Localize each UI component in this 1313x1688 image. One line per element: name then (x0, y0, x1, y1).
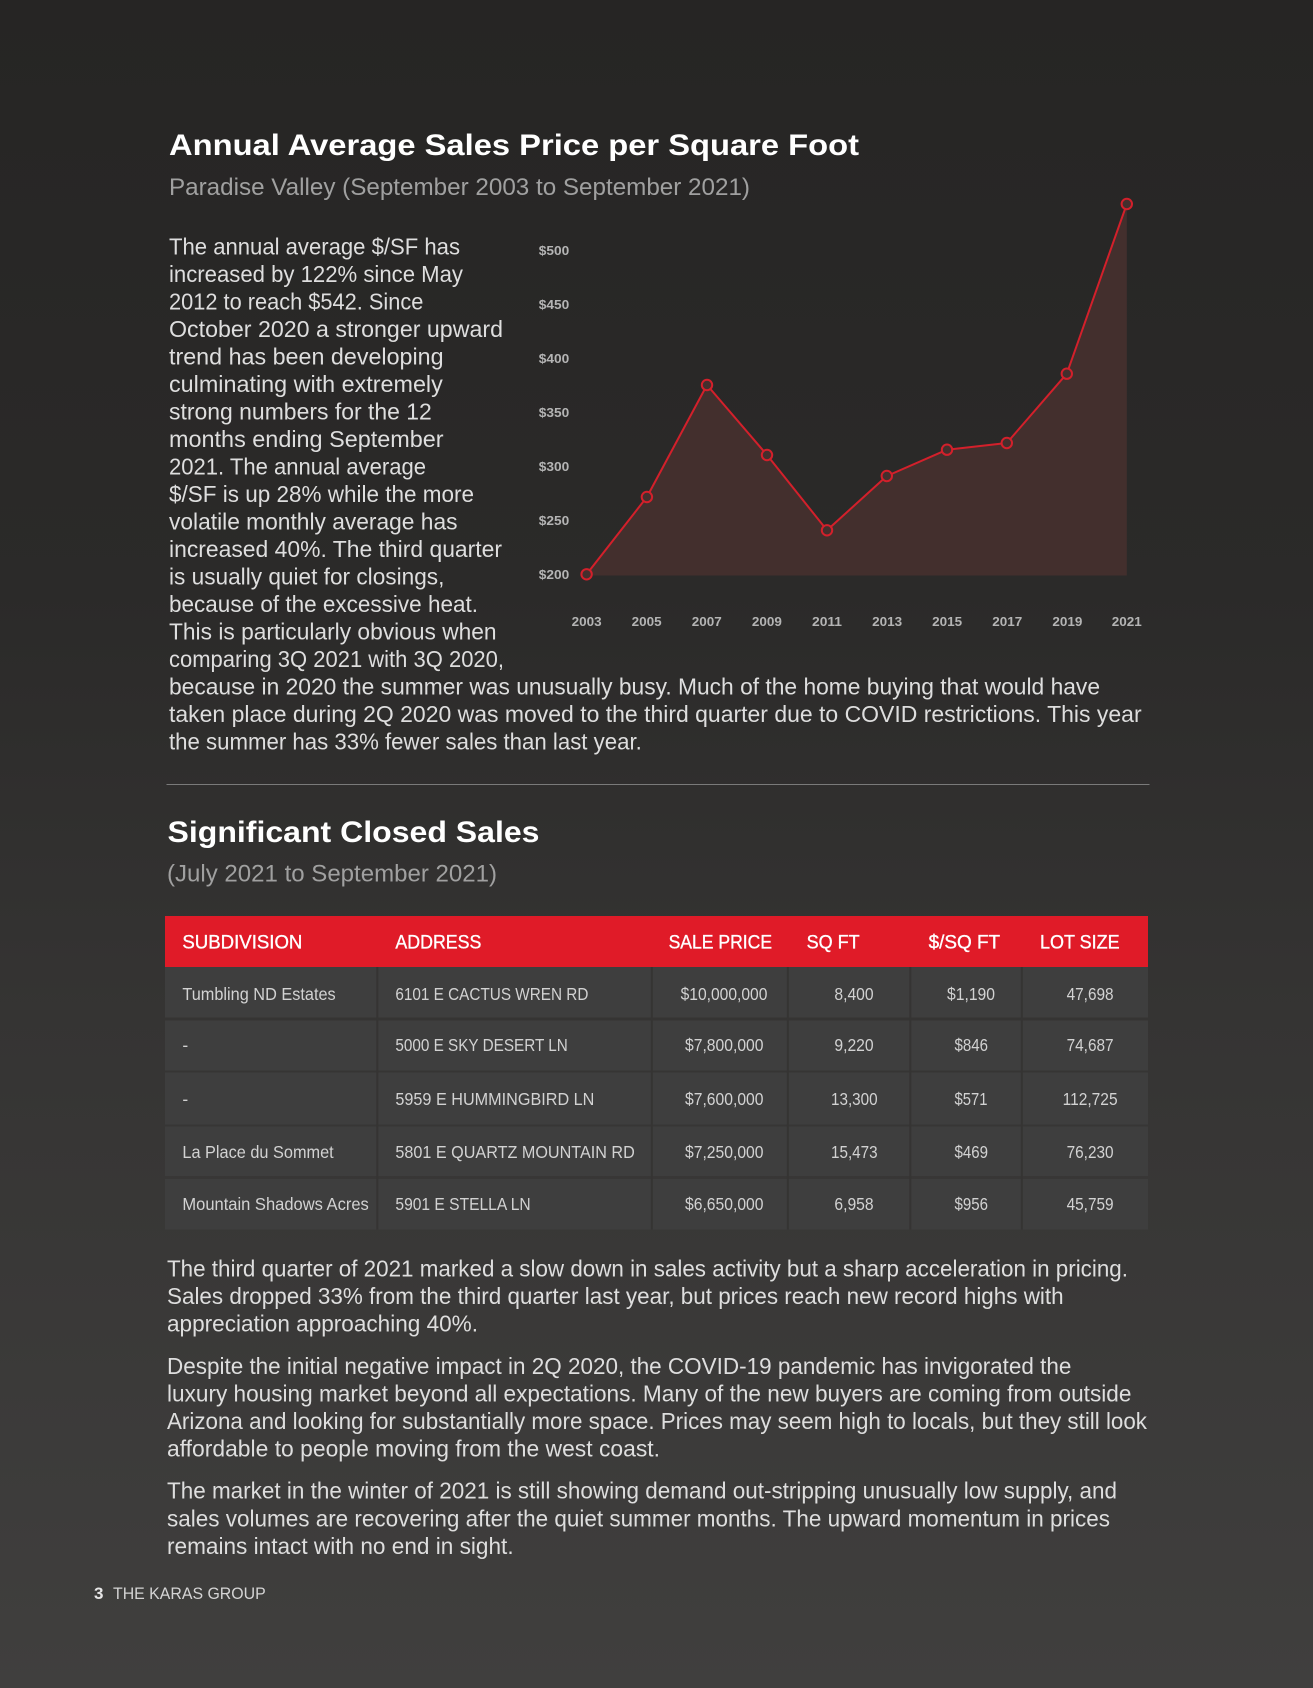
text block: annual average commentary: 2021. The annual average (169, 453, 426, 479)
row 2: 9,220 (834, 1035, 874, 1055)
row 2: $846 (954, 1035, 988, 1055)
text block: annual average commentary: October 2020 a stronger upward (169, 316, 503, 342)
row 1: 6101 E CACTUS WREN RD (395, 984, 588, 1004)
paragraph 3: sales volumes are recovering after the quiet summer months. The upward momentum in prices (167, 1505, 1110, 1531)
paragraph 3 (167, 1478, 1117, 1559)
x axis labels: 2015 (932, 615, 962, 629)
text block: annual average commentary: months ending September (169, 426, 444, 452)
paragraph 2: affordable to people moving from the west coast. (167, 1436, 660, 1462)
x axis labels: 2005 (632, 615, 662, 629)
paragraph 1: The third quarter of 2021 marked a slow down in sales activity but a sharp acceleration in pricing. (167, 1256, 1128, 1282)
price line (587, 204, 1127, 574)
row 4: $7,250,000 (685, 1142, 764, 1162)
y axis labels: $500 (539, 244, 569, 258)
row 5: Mountain Shadows Acres (182, 1194, 369, 1214)
row 3: 5959 E HUMMINGBIRD LN (395, 1089, 594, 1109)
row 4: 76,230 (1067, 1142, 1114, 1162)
table header row: SUBDIVISION (182, 932, 302, 954)
row 5: 45,759 (1067, 1194, 1114, 1214)
text block: annual average commentary: the summer has 33% fewer sales than last year. (169, 728, 642, 754)
text block: annual average commentary: comparing 3Q 2021 with 3Q 2020, (169, 646, 504, 672)
footer: page number and company: 3 (94, 1584, 103, 1603)
heading: significant closed sales: Significant Closed Sales (168, 816, 540, 849)
y axis labels: $400 (539, 352, 569, 366)
text block: annual average commentary: taken place during 2Q 2020 was moved to the third quarter due to COVID restrictions. This year (169, 701, 1142, 727)
row 2 (165, 1020, 1148, 1070)
text block: annual average commentary: culminating with extremely (169, 371, 443, 397)
paragraph 1: appreciation approaching 40%. (167, 1311, 478, 1337)
data point markers (581, 199, 1132, 580)
paragraph 3: The market in the winter of 2021 is still showing demand out-stripping unusually low supply, and (167, 1478, 1117, 1504)
table header row (165, 916, 1148, 967)
row 1: 8,400 (834, 984, 874, 1004)
row 1 (165, 967, 1148, 1018)
x axis labels: 2019 (1052, 615, 1082, 629)
x axis labels: 2017 (992, 615, 1022, 629)
text block: annual average commentary: This is particularly obvious when (169, 618, 497, 644)
y axis labels: $450 (539, 298, 569, 312)
text block: annual average commentary (169, 233, 1142, 754)
row 3: $571 (954, 1089, 988, 1109)
text block: annual average commentary: trend has been developing (169, 343, 444, 369)
text block: annual average commentary: because in 2020 the summer was unusually busy. Much of the home buying that would have (169, 673, 1100, 699)
row 3: $7,600,000 (685, 1089, 764, 1109)
row 4: 15,473 (831, 1142, 878, 1162)
row 5: 5901 E STELLA LN (395, 1194, 531, 1214)
paragraph 2: Despite the initial negative impact in 2Q 2020, the COVID-19 pandemic has invigorated the (167, 1353, 1071, 1379)
row 5: 6,958 (834, 1194, 874, 1214)
table header row: SALE PRICE (669, 932, 772, 954)
x axis labels: 2013 (872, 615, 902, 629)
area fill under line (587, 204, 1127, 576)
y axis labels: $350 (539, 406, 569, 420)
paragraph 2 (167, 1353, 1147, 1462)
x axis labels (572, 615, 1142, 629)
row 5 (165, 1179, 1148, 1230)
x axis labels: 2021 (1112, 615, 1142, 629)
subheading: date range: (July 2021 to September 2021) (167, 860, 497, 888)
text block: annual average commentary: 2012 to reach $542. Since (169, 288, 423, 314)
x axis labels: 2011 (812, 615, 842, 629)
y axis labels: $200 (539, 568, 569, 582)
row 1: Tumbling ND Estates (182, 984, 336, 1004)
text block: annual average commentary: increased 40%. The third quarter (169, 536, 502, 562)
row 4: La Place du Sommet (182, 1142, 334, 1162)
row 5: $956 (954, 1194, 988, 1214)
paragraph 1: Sales dropped 33% from the third quarter last year, but prices reach new record highs with (167, 1283, 1064, 1309)
table header row: $/SQ FT (929, 932, 1000, 954)
row 4: $469 (954, 1142, 988, 1162)
x axis labels: 2009 (752, 615, 782, 629)
panel: significant closed sales (165, 816, 1148, 1230)
row 3: - (182, 1089, 188, 1109)
row 4 (165, 1126, 1148, 1176)
row 1: $10,000,000 (681, 984, 768, 1004)
text block: annual average commentary: increased by 122% since May (169, 261, 463, 287)
text block: annual average commentary: is usually quiet for closings, (169, 563, 444, 589)
text block: annual average commentary: volatile monthly average has (169, 508, 458, 534)
row 2: - (182, 1035, 188, 1055)
row 5: $6,650,000 (685, 1194, 764, 1214)
subheading: paradise valley date range: Paradise Valley (September 2003 to September 2021) (169, 174, 750, 201)
text block: annual average commentary: The annual average $/SF has (169, 233, 460, 259)
row 3: 13,300 (831, 1089, 878, 1109)
row 2: 5000 E SKY DESERT LN (395, 1035, 568, 1055)
row 1: $1,190 (947, 984, 995, 1004)
table: closed sales (165, 916, 1148, 1230)
y axis labels: $250 (539, 514, 569, 528)
paragraph 1 (167, 1256, 1128, 1337)
table header row: SQ FT (807, 932, 860, 954)
row 2: 74,687 (1067, 1035, 1114, 1055)
x axis labels: 2003 (572, 615, 602, 629)
y axis labels: $300 (539, 460, 569, 474)
text block: annual average commentary: $/SF is up 28% while the more (169, 481, 474, 507)
row 4: 5801 E QUARTZ MOUNTAIN RD (395, 1142, 635, 1162)
paragraph 3: remains intact with no end in sight. (167, 1533, 514, 1559)
line chart: price per square foot 2003 to 2021 (539, 199, 1142, 629)
text block: annual average commentary: because of the excessive heat. (169, 591, 478, 617)
text block: annual average commentary: strong numbers for the 12 (169, 398, 432, 424)
paragraph 2: Arizona and looking for substantially more space. Prices may seem high to locals, but they still look (167, 1408, 1147, 1434)
row 3 (165, 1072, 1148, 1124)
footer: page number and company: THE KARAS GROUP (113, 1584, 266, 1603)
text block: market commentary (167, 1256, 1147, 1559)
row 3: 112,725 (1063, 1089, 1118, 1109)
x axis labels: 2007 (692, 615, 722, 629)
paragraph 2: luxury housing market beyond all expectations. Many of the new buyers are coming from outside (167, 1381, 1131, 1407)
row 2: $7,800,000 (685, 1035, 764, 1055)
row 1: 47,698 (1067, 984, 1114, 1004)
table header row: ADDRESS (395, 932, 481, 954)
heading: annual average sales price: Annual Average Sales Price per Square Foot (169, 129, 859, 162)
table header row: LOT SIZE (1040, 932, 1120, 954)
panel: annual price per square foot (169, 129, 1142, 754)
y axis labels (539, 244, 569, 582)
